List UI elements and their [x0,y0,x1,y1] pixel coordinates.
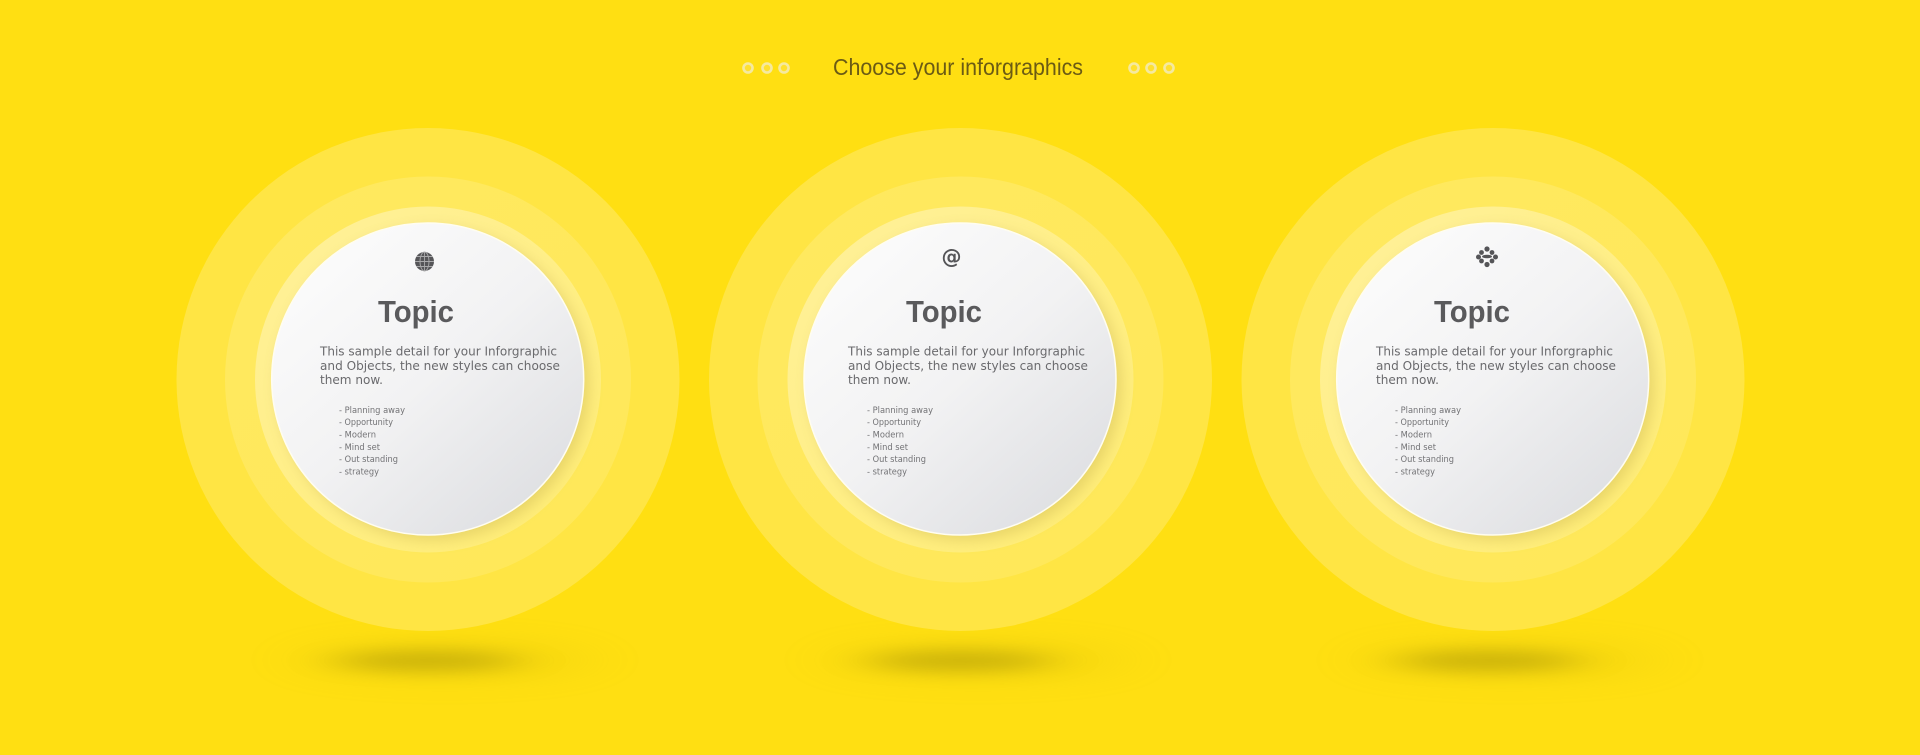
bullet list: - Out standing [867,455,926,465]
title: Choose your inforgraphics [833,54,1083,80]
right header dots [1130,64,1174,72]
heading: Topic [378,294,454,329]
bullet list [339,406,405,478]
concentric rings [176,128,680,631]
white disc [1337,223,1649,535]
bullet list: - Out standing [339,455,398,465]
body text: This sample detail for your Inforgraphic [319,344,557,358]
floor shadow [1360,640,1660,680]
floor shadow [828,640,1128,680]
body text: and Objects, the new styles can choose [848,358,1088,373]
bullet list: - Opportunity [1395,418,1449,428]
bullet list [867,406,933,478]
concentric rings [709,128,1212,631]
bullet list: - Modern [867,430,904,440]
bullet list: - Modern [339,430,376,440]
body text [1375,344,1616,387]
bullet list: - Opportunity [339,418,393,428]
bullet list: - Mind set [867,443,909,453]
bullet list: - Planning away [1395,406,1461,416]
bullet list: - Planning away [867,406,933,416]
body text: This sample detail for your Inforgraphic [847,344,1085,358]
panel: right circle [1242,128,1744,680]
panel: left circle [176,128,680,680]
body text [847,344,1088,387]
body text: them now. [320,372,383,387]
body text: them now. [848,372,911,387]
bullet list: - Planning away [339,406,405,416]
bullet list [1395,406,1461,478]
bullet list: - strategy [339,468,379,478]
body text: them now. [1376,372,1439,387]
white disc [272,223,584,535]
header [744,54,1174,80]
bullet list: - strategy [867,468,907,478]
bullet list: - Out standing [1395,455,1454,465]
body text: and Objects, the new styles can choose [320,358,560,373]
concentric rings [1242,128,1744,631]
white disc [804,223,1116,535]
bullet list: - strategy [1395,468,1435,478]
left header dots [744,64,788,72]
heading: Topic [1434,294,1510,329]
icon: at sign: @ [942,244,962,268]
heading: Topic [906,294,982,329]
icon: network diamond [1476,246,1498,267]
body text: This sample detail for your Inforgraphic [1375,344,1613,358]
bullet list: - Mind set [1395,443,1437,453]
bullet list: - Modern [1395,430,1432,440]
body text: and Objects, the new styles can choose [1376,358,1616,373]
bullet list: - Opportunity [867,418,921,428]
bullet list: - Mind set [339,443,381,453]
floor shadow [295,640,595,680]
icon: globe [415,252,434,271]
panel: middle circle [709,128,1212,680]
body text [319,344,560,387]
